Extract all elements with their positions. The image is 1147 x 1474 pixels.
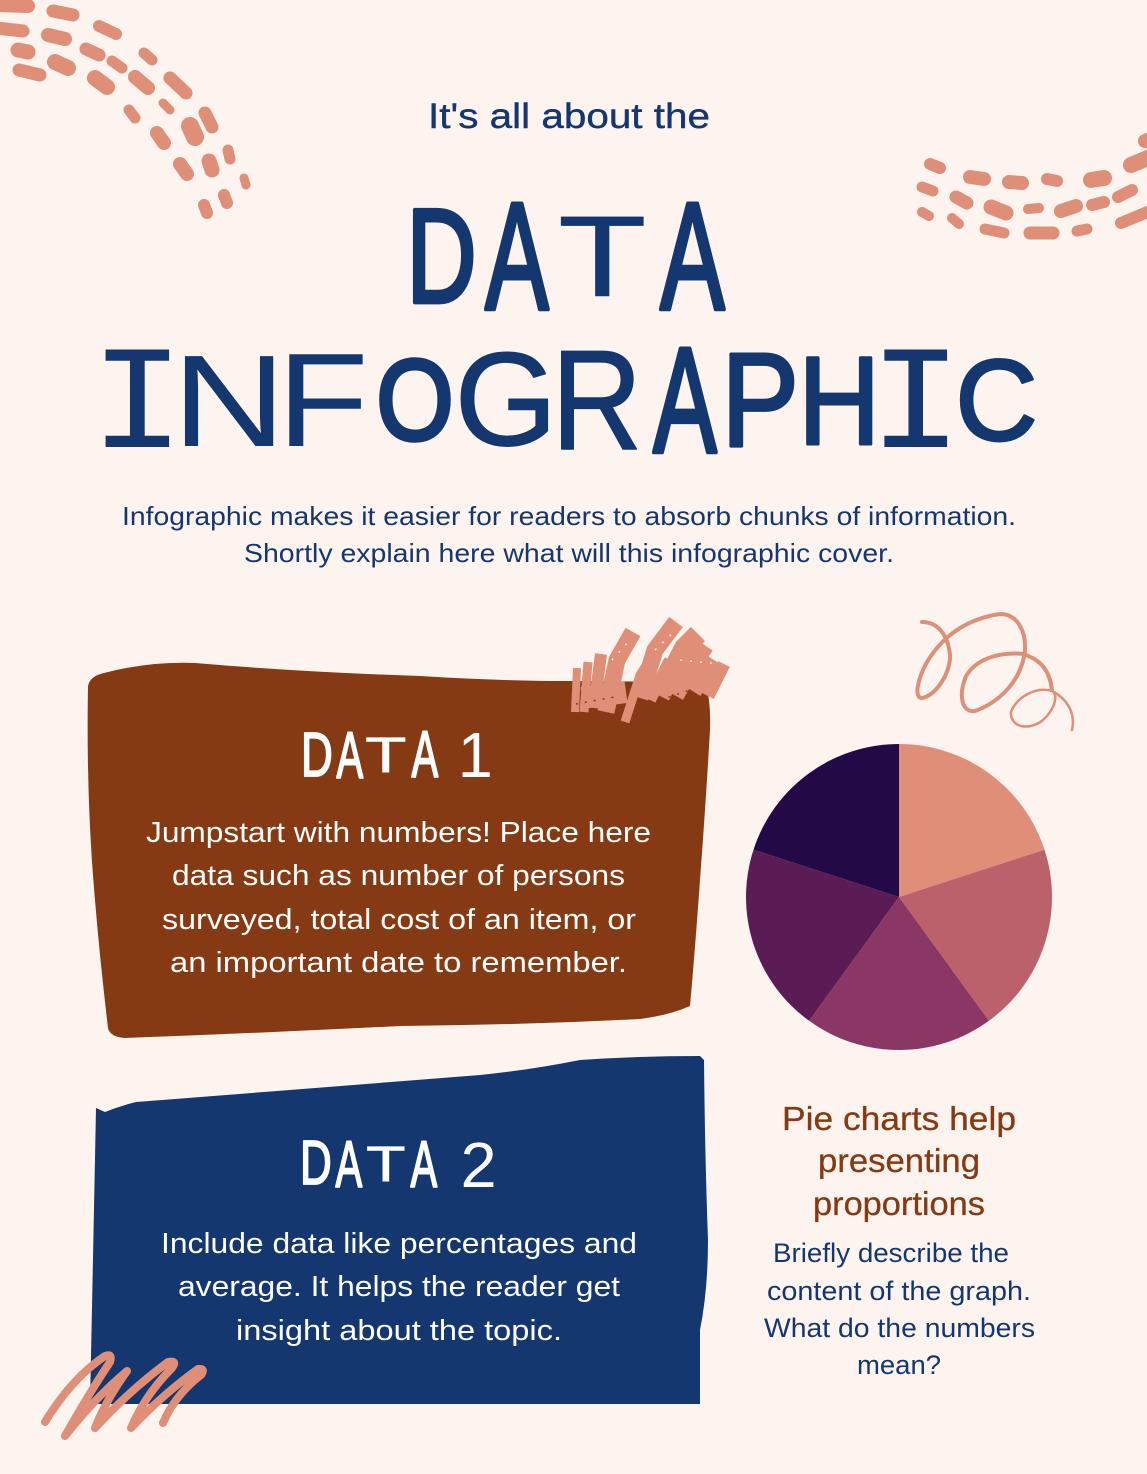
heading: data 2 [300, 1128, 497, 1202]
heading: pie chart caption: proportions [813, 1185, 985, 1222]
title: T [558, 192, 647, 321]
text: data 1 body: surveyed, total cost of an item, or [162, 904, 636, 936]
title: A [653, 316, 717, 484]
text: pie chart description: mean? [857, 1350, 941, 1380]
decoration: top-right dashes [922, 139, 1147, 233]
title: P [721, 326, 799, 475]
heading: data 1: D [301, 721, 333, 790]
heading: data 2: T [366, 1137, 406, 1192]
text: pie chart description: What do the numbers [764, 1313, 1035, 1343]
title: G [455, 326, 557, 474]
heading: pie chart caption: presenting [818, 1142, 980, 1179]
title [90, 171, 1037, 492]
panel: data 2 [90, 1056, 708, 1404]
panel: data 1 [88, 663, 710, 1038]
text: data 2 body [161, 1228, 637, 1347]
title: D [407, 182, 476, 331]
intro description [122, 501, 1016, 568]
text: data 1 body: an important date to remember. [170, 947, 627, 979]
title: O [376, 336, 454, 464]
intro description: Shortly explain here what will this infographic cover. [244, 538, 894, 568]
title: R [551, 321, 642, 480]
title: I [869, 323, 963, 492]
decoration: crayon scribble [575, 622, 724, 722]
heading: data 1 [301, 718, 493, 793]
decoration: marker scribble [45, 1355, 203, 1436]
heading: data 2: A [336, 1128, 363, 1202]
title: N [172, 328, 286, 474]
title: A [485, 171, 549, 341]
text: data 2 body: insight about the topic. [236, 1315, 562, 1347]
intro tagline: It's all about the [428, 97, 710, 136]
heading: data 2: 2 [460, 1129, 497, 1201]
heading: data 2: D [300, 1129, 332, 1198]
text: data 2 body: Include data like percentages and [161, 1228, 637, 1260]
title: H [798, 332, 880, 471]
title: A [660, 171, 725, 342]
title: C [956, 336, 1037, 465]
text: pie chart description: Briefly describe the [773, 1238, 1009, 1268]
heading: data 2: A [410, 1128, 438, 1202]
title: F [277, 327, 369, 475]
text: data 1 body: Jumpstart with numbers! Place here [146, 817, 651, 849]
text: data 2 body: average. It helps the reader get [178, 1271, 620, 1303]
intro description: Infographic makes it easier for readers to absorb chunks of information. [122, 501, 1016, 531]
decoration: swirl [917, 614, 1073, 730]
pie chart [746, 744, 1052, 1050]
heading: data 1: A [412, 718, 439, 792]
text: data 1 body: data such as number of persons [172, 860, 625, 892]
text: pie chart description: content of the graph. [767, 1276, 1031, 1306]
text: data 1 body [146, 817, 651, 979]
heading: data 1: T [365, 727, 407, 783]
decoration: top-left dashes [0, 5, 246, 213]
heading: pie chart caption [782, 1100, 1016, 1222]
heading: pie chart caption: Pie charts help [782, 1100, 1016, 1137]
title: I [90, 324, 185, 491]
heading: data 1: 1 [458, 721, 493, 791]
heading: data 1: A [336, 719, 364, 793]
text: pie chart description [764, 1238, 1035, 1380]
